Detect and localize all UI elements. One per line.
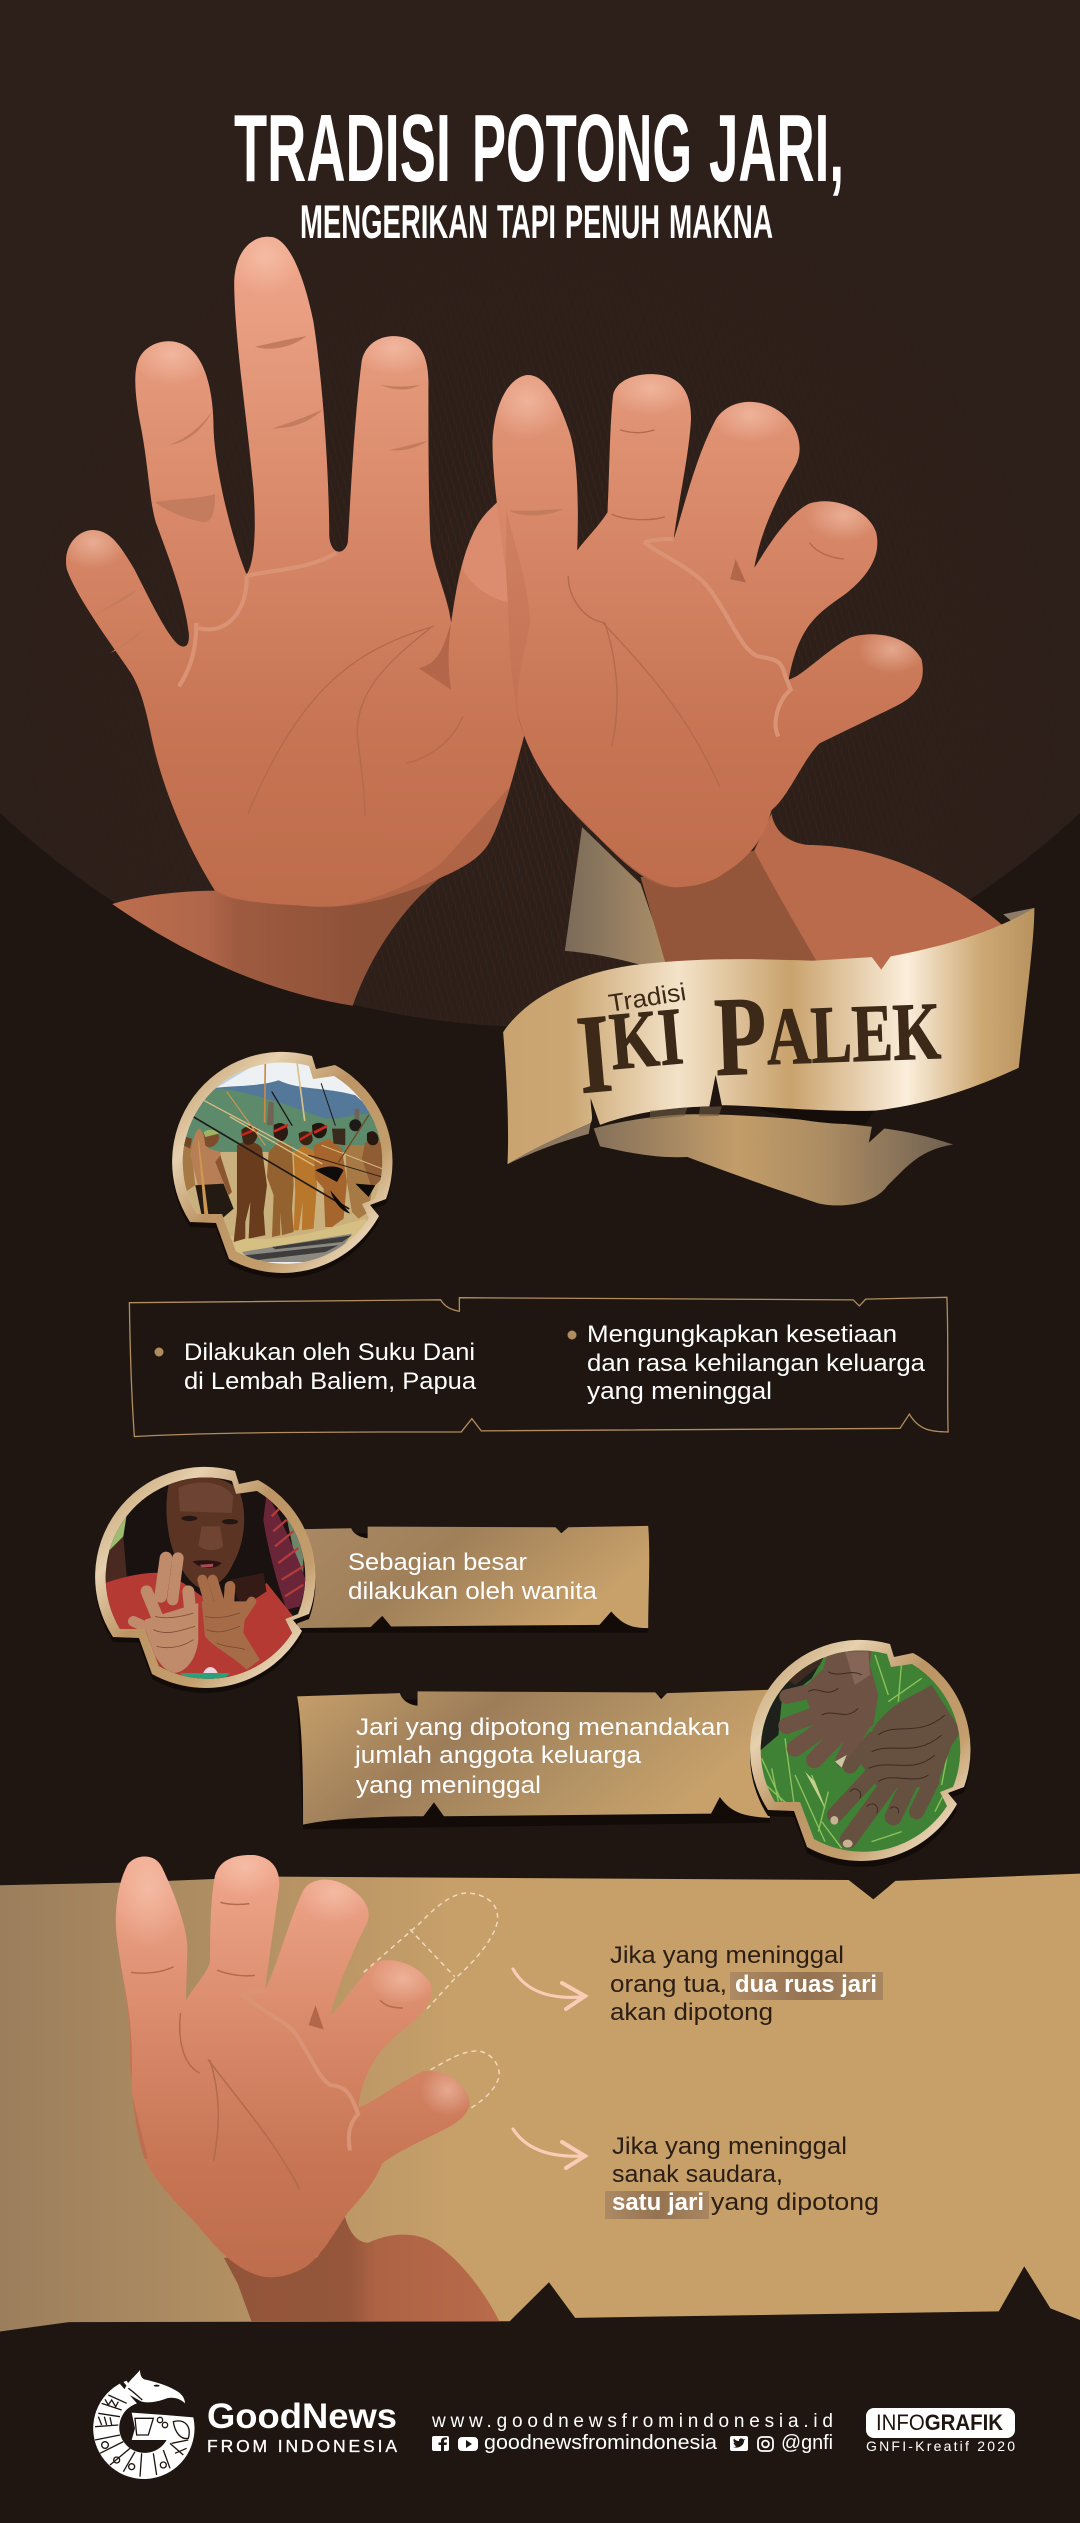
text: siblings rule: yang dipotong [711, 2189, 879, 2216]
text: parents rule: Jika yang meninggal [610, 1942, 844, 1969]
title [234, 95, 844, 248]
title: JARI, [709, 95, 844, 202]
text: parents rule: akan dipotong [610, 1999, 773, 2026]
title: MENGERIKAN [300, 195, 488, 248]
bullet: kesetiaan: Mengungkapkan kesetiaan [587, 1321, 897, 1348]
bullet: kesetiaan [568, 1321, 926, 1405]
title: PENUH [565, 195, 660, 248]
woman's hands [133, 1558, 252, 1630]
right hand [486, 362, 926, 887]
title: TRADISI [234, 95, 451, 202]
panel: fingers mark family members [297, 1690, 770, 1829]
upper hand [787, 1650, 878, 1768]
banner text: Tradisi Iki Palek: ALEK [765, 985, 942, 1082]
icon: instagram [758, 2437, 773, 2451]
bullet: Suku Dani: Dilakukan oleh Suku Dani [184, 1339, 475, 1366]
dark dome behind hands [0, 0, 1080, 1027]
banner text: Tradisi Iki Palek [572, 966, 943, 1118]
arrow: parents [513, 1969, 585, 2009]
icon: twitter [730, 2436, 748, 2451]
bullet: kesetiaan: dan rasa kehilangan keluarga [587, 1350, 926, 1377]
text: siblings rule: satu jari [612, 2189, 704, 2216]
bullet: kesetiaan: yang meninggal [587, 1378, 772, 1405]
text: parents rule: dua ruas jari [735, 1971, 877, 1998]
text: siblings rule: sanak saudara, [612, 2161, 783, 2188]
banner text: Tradisi Iki Palek: P [712, 973, 769, 1100]
footer: website and social handles: goodnewsfromindonesia [484, 2432, 718, 2454]
icon: youtube [458, 2437, 478, 2451]
title: POTONG [472, 95, 692, 202]
dashed outlines of removed fingers [364, 1893, 499, 2110]
banner text: Tradisi Iki Palek: Tradisi [607, 978, 688, 1018]
photo: Dani tribe warriors [165, 1045, 400, 1280]
lower hand [835, 1685, 962, 1840]
text: parents rule [610, 1942, 883, 2026]
badge: infografik: GNFI-Kreatif 2020 [866, 2438, 1015, 2454]
text: parents rule: orang tua, [610, 1971, 727, 1998]
title: MAKNA [669, 195, 773, 248]
footer: website and social handles: @gnfi [781, 2432, 833, 2454]
logo: GoodNews emblem [93, 2370, 195, 2479]
illustration: two raised hands [59, 221, 1013, 1006]
panel: mostly done by women: dilakukan oleh wanita [348, 1578, 598, 1605]
panel: mostly done by women: Sebagian besar [348, 1549, 527, 1576]
logo: GoodNews wordmark: GoodNews [207, 2397, 397, 2436]
panel: fingers mark family members: yang meninggal [356, 1772, 541, 1799]
dani warrior figures [182, 1119, 384, 1242]
left hand [59, 221, 525, 937]
panel: mostly done by women [297, 1526, 649, 1633]
panel: fingers mark family members: jumlah anggota keluarga [354, 1742, 642, 1769]
panel: bullet points box [129, 1297, 948, 1437]
text: siblings rule [605, 2133, 879, 2219]
footer: website and social handles [431, 2411, 833, 2454]
icon: facebook [432, 2436, 449, 2451]
panel: fingers mark family members: Jari yang dipotong menandakan [356, 1714, 730, 1741]
illustration: hand with cut fingers [107, 1829, 499, 2321]
spears [194, 1092, 382, 1209]
banner ribbon [503, 908, 1034, 1205]
logo: GoodNews wordmark: FROM INDONESIA [207, 2436, 397, 2456]
footer: website and social handles: www.goodnewsfromindonesia.id [431, 2411, 833, 2432]
banner text: Tradisi Iki Palek: I [572, 990, 616, 1118]
bullet: Suku Dani: di Lembah Baliem, Papua [184, 1368, 477, 1395]
badge: infografik [866, 2408, 1015, 2454]
badge: infografik: INFOGRAFIK [876, 2410, 1003, 2435]
text: siblings rule: Jika yang meninggal [612, 2133, 847, 2160]
logo: GoodNews wordmark [207, 2397, 397, 2456]
bullet: Suku Dani [154, 1339, 477, 1395]
photo: scarred hands on grass [745, 1635, 975, 1870]
arrow: siblings [513, 2129, 585, 2168]
banner text: Tradisi Iki Palek: KI [606, 990, 686, 1087]
photo: woman showing hands [90, 1460, 320, 1695]
panel: tan bottom section [0, 1874, 1080, 2332]
title: TAPI [497, 195, 556, 248]
